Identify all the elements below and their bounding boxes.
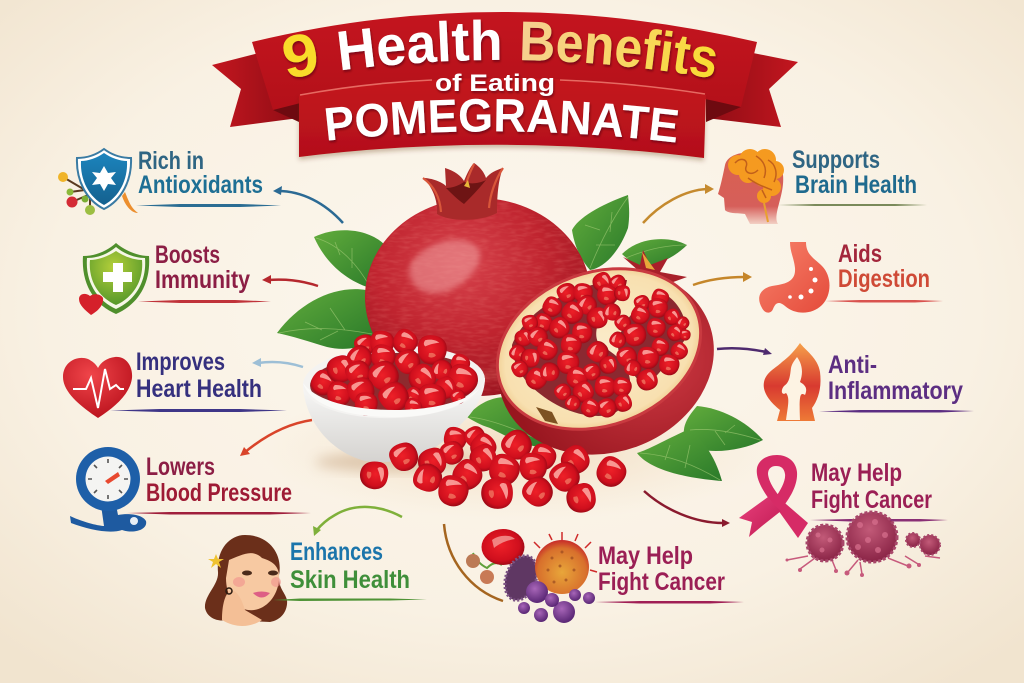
arrow xyxy=(643,184,714,223)
icon: blue shield with berries xyxy=(58,149,138,215)
bowl body xyxy=(303,378,485,462)
arrow xyxy=(693,272,752,285)
label: Lowers xyxy=(146,453,215,481)
arc arrow xyxy=(444,524,503,601)
leaf lower right top xyxy=(684,406,763,451)
benefit: anti-inflammatory xyxy=(717,343,974,421)
leaf lower right bottom xyxy=(637,430,722,481)
label: Digestion xyxy=(838,265,930,293)
icon: green shield xyxy=(79,243,149,315)
leaf upper left xyxy=(314,230,385,288)
leaf upper right xyxy=(572,195,629,270)
label: Supports xyxy=(792,146,880,174)
label: Brain Health xyxy=(795,171,917,199)
underline xyxy=(819,410,974,412)
leaf right small xyxy=(622,239,687,266)
whole pomegranate xyxy=(365,163,591,396)
label xyxy=(828,351,963,405)
seeds right chamber xyxy=(607,286,692,393)
ribbon left tail xyxy=(212,53,299,127)
arrow xyxy=(262,275,318,286)
fruit skin texture xyxy=(366,199,590,395)
icon: fruit cluster xyxy=(466,529,597,623)
icon: woman's face xyxy=(205,535,287,626)
leaf lower left xyxy=(277,289,373,349)
underline xyxy=(273,598,427,601)
arrow xyxy=(313,507,402,536)
cut pomegranate half xyxy=(472,239,740,484)
label: Enhances xyxy=(290,538,383,566)
label: Aids xyxy=(838,240,882,268)
benefit: enhances skin health xyxy=(205,507,427,626)
benefit: may help fight cancer (ribbon) xyxy=(644,455,948,577)
label: Rich in xyxy=(138,147,204,175)
icon: stomach xyxy=(759,242,830,313)
underline xyxy=(810,519,948,522)
crown xyxy=(423,163,503,220)
bowl front rim xyxy=(303,378,485,417)
underline xyxy=(825,300,943,302)
calyx tips xyxy=(623,250,687,285)
bowl seeds xyxy=(306,325,483,419)
loose seeds xyxy=(358,423,632,515)
underline xyxy=(138,300,271,303)
label: Fight Cancer xyxy=(598,568,725,596)
label: Immunity xyxy=(155,266,250,294)
title line one xyxy=(283,20,718,80)
benefit: supports brain health xyxy=(643,146,927,224)
flesh blemish xyxy=(536,407,558,424)
icon: blood pressure gauge xyxy=(70,447,146,532)
hero: pomegranate still life xyxy=(260,163,780,520)
underline xyxy=(136,204,281,207)
icon: cancer cells xyxy=(786,512,940,577)
title line two: of Eating xyxy=(435,70,555,97)
label: Blood Pressure xyxy=(146,479,292,507)
fruit highlight xyxy=(409,240,480,293)
rind rim xyxy=(473,239,725,459)
title line three: POMEGRANATE xyxy=(326,98,680,146)
underline xyxy=(110,409,287,412)
seed chambers xyxy=(512,280,630,416)
arrow xyxy=(252,358,303,367)
label xyxy=(138,147,263,199)
label xyxy=(155,241,250,294)
label xyxy=(290,538,410,594)
icon: head with brain xyxy=(718,149,784,224)
bowl rim xyxy=(302,343,486,421)
label xyxy=(811,459,932,514)
ribbon highlight lines xyxy=(300,80,705,95)
label: Inflammatory xyxy=(828,377,963,405)
benefit: lowers blood pressure xyxy=(70,420,312,532)
seeds left chamber xyxy=(506,270,634,421)
arrow xyxy=(273,186,343,223)
label: May Help xyxy=(811,459,902,487)
ribbon lower band xyxy=(299,78,706,158)
ribbon upper band xyxy=(252,12,757,110)
icon: hands and flame xyxy=(764,343,821,421)
flesh xyxy=(477,243,721,455)
label xyxy=(792,146,917,199)
benefit: improves heart health xyxy=(63,348,303,418)
label xyxy=(598,542,725,596)
table shadow xyxy=(260,380,780,520)
arrow xyxy=(644,491,730,527)
title banner xyxy=(212,12,798,164)
label xyxy=(136,348,262,403)
label: May Help xyxy=(598,542,693,570)
label: Fight Cancer xyxy=(811,486,932,514)
arrow xyxy=(240,420,312,456)
title line one: Benefits xyxy=(522,22,718,80)
label: Anti- xyxy=(828,351,877,379)
label: Improves xyxy=(136,348,225,376)
ribbon folds xyxy=(273,90,741,122)
label: Boosts xyxy=(155,241,220,269)
label xyxy=(838,240,930,293)
label: Heart Health xyxy=(136,375,262,403)
underline xyxy=(778,204,927,206)
title line one: Health xyxy=(338,20,502,73)
arrow xyxy=(717,348,772,355)
icon: pink ribbon xyxy=(739,455,808,538)
label: Skin Health xyxy=(290,566,410,594)
ribbon right tail xyxy=(706,53,798,127)
benefit: may help fight cancer (berries) xyxy=(444,524,744,623)
underline xyxy=(126,512,311,514)
label xyxy=(146,453,292,507)
underline xyxy=(595,601,744,604)
leaf under bowl xyxy=(467,397,555,447)
white bowl of seeds xyxy=(302,325,486,472)
small heart xyxy=(79,294,103,315)
label: Antioxidants xyxy=(138,171,263,199)
benefit: boosts immunity xyxy=(79,241,318,315)
title line one: 9 xyxy=(283,34,318,80)
benefit: aids digestion xyxy=(693,240,943,313)
benefit: rich in antioxidants xyxy=(58,147,343,223)
icon: heart with pulse xyxy=(63,357,132,418)
